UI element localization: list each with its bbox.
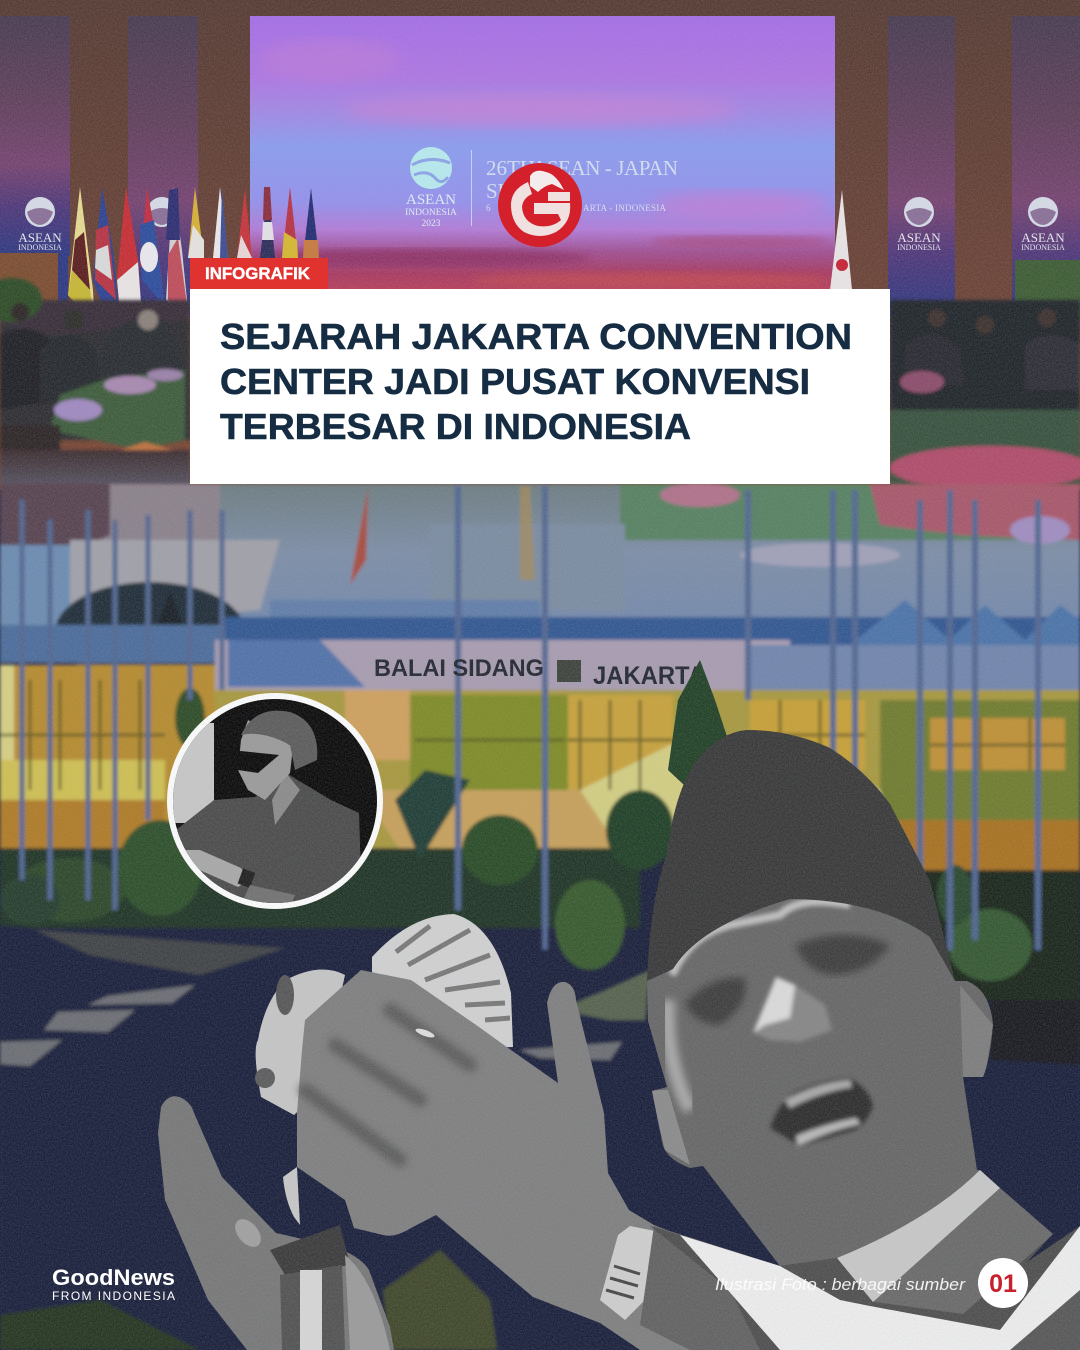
ASEAN Indonesia logo on screen: 2023 — [422, 219, 441, 229]
delegates and flower arrangements, right — [890, 300, 1080, 490]
background photo: conference hall: ASEAN — [897, 230, 941, 245]
road — [0, 925, 1080, 1350]
peci hat — [647, 730, 955, 981]
presentation screen: 6 — [486, 203, 491, 213]
background photo: conference hall — [0, 0, 1080, 490]
flag poles — [22, 486, 1038, 950]
background photo: conference hall: INDONESIA — [1021, 243, 1065, 252]
ear shading — [650, 1090, 690, 1165]
shirt and collar — [650, 1170, 1080, 1350]
title text: SEJARAH JAKARTA CONVENTION — [220, 316, 852, 357]
face — [640, 890, 1000, 1275]
cutout: microphone — [255, 914, 513, 1225]
cutout: man speaking with peci — [640, 730, 1080, 1350]
infographic tag: INFOGRAFIK — [205, 264, 311, 283]
title text: CENTER JADI PUSAT KONVENSI — [220, 361, 810, 402]
presentation screen: 26TH — [486, 156, 535, 180]
upper overlay: garden foliage and flowers — [620, 484, 1080, 540]
sign lettering: BALAI SIDANG — [374, 655, 544, 682]
page number badge: 01 — [989, 1270, 1017, 1298]
page number badge — [978, 1258, 1028, 1308]
roof band — [0, 625, 225, 663]
background photo: conference hall: INDONESIA — [18, 243, 62, 252]
presentation screen: ARTA - INDONESIA — [583, 203, 666, 213]
delegates and flower arrangements, left — [0, 278, 190, 486]
presentation screen: SU — [486, 179, 513, 203]
forehead highlight — [672, 902, 850, 975]
brand: GoodNews from Indonesia — [52, 1265, 175, 1303]
sign lettering — [374, 655, 705, 690]
logo: red G emblem with eagle — [498, 163, 582, 247]
row of ASEAN flags — [68, 187, 852, 325]
lit lobby and windows — [0, 665, 215, 850]
ASEAN banner logos — [25, 197, 1058, 227]
background photo: conference hall: ASEAN — [18, 230, 62, 245]
cypress tree in front of sign — [668, 660, 738, 800]
background photo: Balai Sidang Jakarta building — [0, 483, 1080, 1350]
sign lettering: JAKARTA — [593, 662, 705, 690]
eye sockets — [685, 978, 746, 1025]
portrait: man with sunglasses — [167, 693, 383, 909]
brand: GoodNews from Indonesia: FROM INDONESIA — [52, 1289, 175, 1303]
ASEAN Indonesia logo on screen: ASEAN — [406, 192, 456, 208]
background photo: conference hall: INDONESIA — [897, 243, 941, 252]
building fascia — [215, 640, 790, 692]
background photo: conference hall: ASEAN — [1021, 230, 1065, 245]
title text — [220, 316, 852, 447]
cutout: left hand and mic stand — [158, 1096, 394, 1350]
title panel — [190, 289, 890, 484]
ASEAN Indonesia logo on screen: INDONESIA — [405, 208, 457, 218]
mouth — [770, 1078, 873, 1146]
shirt sleeve — [640, 1226, 880, 1350]
trees and shrubs — [0, 848, 640, 928]
presentation screen — [250, 16, 835, 290]
title text: TERBESAR DI INDONESIA — [220, 406, 691, 447]
nose — [753, 977, 832, 1042]
photo credit: Ilustrasi Foto : berbagai sumber — [715, 1275, 966, 1294]
brand: GoodNews from Indonesia: GoodNews — [52, 1265, 175, 1290]
ASEAN Indonesia logo on screen — [405, 147, 457, 229]
presentation screen: ASEAN - JAPAN — [532, 156, 678, 180]
cutout: right hand and arm — [297, 970, 880, 1350]
wristwatch — [600, 1226, 660, 1320]
infographic tag — [190, 258, 328, 289]
